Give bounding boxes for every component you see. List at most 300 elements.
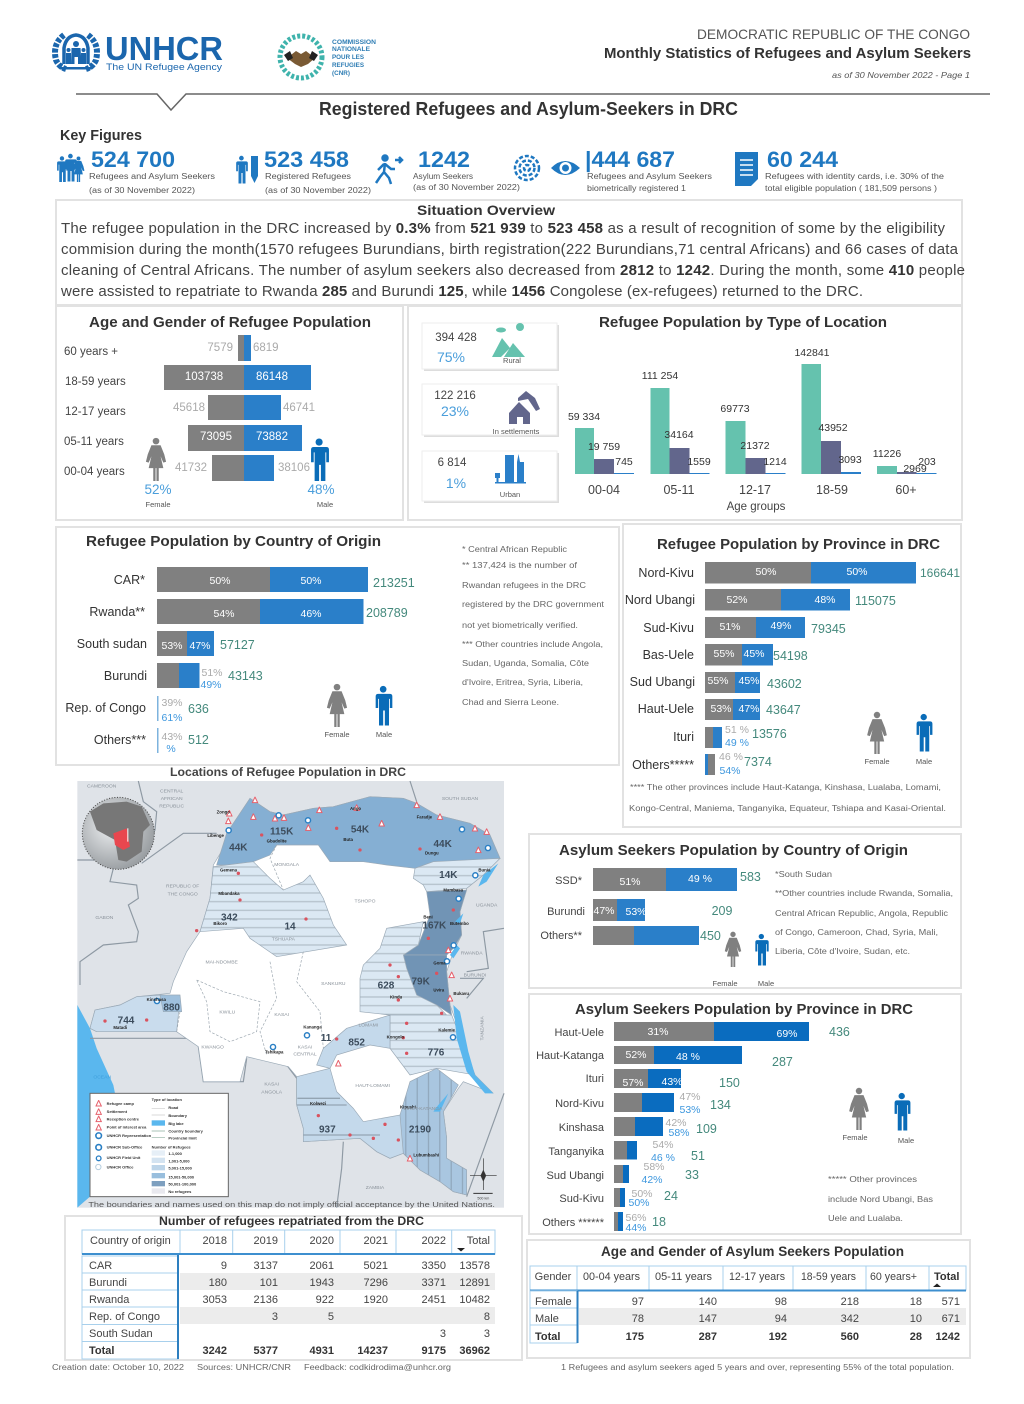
bar chart: 50% bbox=[631, 1188, 653, 1200]
site names: Kongolo bbox=[387, 1034, 405, 1039]
table: 10482 bbox=[459, 1294, 490, 1306]
caption: Refugees with identity cards, i.e. 30% of the bbox=[765, 172, 945, 181]
bar chart: age groups by location type bbox=[568, 347, 936, 513]
panel: refugee population by province bbox=[623, 524, 961, 827]
bar chart: country of origin: 53% bbox=[161, 640, 183, 652]
bar chart: country of origin: 43143 bbox=[228, 669, 263, 683]
bar chart: age groups by location type: 2969 bbox=[903, 463, 927, 475]
table: CAR bbox=[89, 1260, 112, 1272]
bar chart: 44% bbox=[625, 1222, 647, 1234]
pyramid chart: 73095 bbox=[200, 431, 232, 443]
table: 00-04 years bbox=[583, 1271, 640, 1283]
bar chart: 209 bbox=[712, 904, 732, 918]
refugee counts: 167K bbox=[422, 921, 447, 932]
header: report title: DEMOCRATIC REPUBLIC OF THE CONGO bbox=[697, 26, 970, 42]
bar chart: age groups by location type: 21372 bbox=[740, 440, 770, 452]
bar chart: country of origin: 39% bbox=[161, 697, 183, 709]
footnotes bbox=[462, 545, 605, 707]
bar chart: 134 bbox=[710, 1098, 731, 1112]
bar chart: Others ****** bbox=[542, 1217, 605, 1229]
footnotes: * Central African Republic bbox=[462, 545, 567, 554]
key figure: refugees: (as of 30 November 2022) bbox=[265, 186, 371, 195]
bar chart: country of origin: 47% bbox=[189, 640, 211, 652]
bar chart: age groups by location type: 3093 bbox=[838, 454, 862, 466]
map legend: Reception centre bbox=[107, 1116, 140, 1121]
icon: compass and scale bar bbox=[470, 1158, 497, 1200]
section heading: key figures: Key Figures bbox=[60, 127, 142, 144]
bar chart: SSD* bbox=[555, 875, 583, 887]
bar chart: province: 46 % bbox=[719, 751, 743, 763]
legend labels bbox=[324, 730, 392, 739]
bar chart: 69% bbox=[776, 1028, 798, 1040]
pyramid chart: 103738 bbox=[185, 371, 223, 383]
card: urban: Urban bbox=[500, 490, 520, 499]
pyramid chart: 46741 bbox=[283, 402, 315, 414]
bar chart: province: Sud Ubangi bbox=[630, 675, 695, 689]
bar chart bbox=[540, 868, 761, 945]
site names: Zongo bbox=[217, 809, 230, 814]
table: 2019 bbox=[254, 1235, 278, 1247]
footnote: Uele and Lualaba. bbox=[828, 1214, 903, 1223]
header: report title bbox=[604, 26, 971, 80]
site names: Tshikapa bbox=[265, 1049, 284, 1054]
lakes bbox=[433, 863, 498, 1112]
panel: age and gender of refugee population bbox=[56, 306, 403, 520]
heading: Asylum Seekers Population by Province in DRC bbox=[575, 1001, 913, 1018]
bar chart: province: Others***** bbox=[632, 758, 694, 772]
table: 1920 bbox=[364, 1294, 388, 1306]
table: 12-17 years bbox=[729, 1271, 785, 1283]
panel: refugee population by country of origin bbox=[56, 527, 619, 765]
bar chart: age groups by location type: 12-17 bbox=[739, 483, 771, 497]
footer: creation date, sources and feedback: Feedback: codkidrodima@unhcr.org bbox=[304, 1363, 451, 1372]
table: 98 bbox=[775, 1296, 787, 1308]
legend labels: Female bbox=[842, 1133, 868, 1142]
country and province labels: MONGALA bbox=[274, 862, 300, 868]
table: 97 bbox=[632, 1296, 644, 1308]
footnote bbox=[828, 1175, 933, 1223]
table: 2018 bbox=[203, 1235, 227, 1247]
legend labels bbox=[864, 757, 932, 766]
bar chart: 54% bbox=[652, 1139, 674, 1151]
pyramid chart: 73882 bbox=[256, 431, 288, 443]
icon: fingerprint bbox=[515, 156, 539, 180]
site names: Kolwezi bbox=[310, 1101, 326, 1106]
bar chart: country of origin: Burundi bbox=[104, 669, 147, 683]
bar chart: country of origin: Rwanda** bbox=[89, 605, 145, 619]
bar chart: province bbox=[625, 562, 960, 777]
bar chart: country of origin bbox=[65, 567, 415, 755]
map legend: No refugees bbox=[168, 1189, 192, 1194]
pyramid chart bbox=[64, 335, 315, 481]
refugee site markers bbox=[103, 797, 491, 1161]
bar chart: 31% bbox=[647, 1026, 669, 1038]
key figure: identity cards bbox=[735, 147, 945, 193]
CNR name bbox=[332, 40, 376, 77]
bar chart: 583 bbox=[740, 870, 761, 884]
map: locations of refugee population bbox=[77, 781, 504, 1209]
country and province labels: UGANDA bbox=[476, 903, 498, 909]
bar chart: province: 166641 bbox=[920, 566, 960, 580]
pyramid chart: 18-59 years bbox=[65, 376, 126, 388]
bar chart: country of origin: 636 bbox=[188, 702, 209, 716]
card: rural bbox=[422, 323, 559, 371]
table: Female bbox=[535, 1296, 572, 1308]
panel: situation overview bbox=[56, 200, 965, 305]
table: 18 bbox=[910, 1296, 922, 1308]
map legend: UNHCR Representation bbox=[107, 1133, 152, 1138]
panel: asylum seekers by province bbox=[529, 994, 961, 1234]
icon: female bbox=[849, 1088, 869, 1130]
card: rural: 75% bbox=[437, 349, 465, 365]
legend labels: Male bbox=[758, 979, 774, 988]
bar chart: Nord-Kivu bbox=[555, 1098, 604, 1110]
icon: male bbox=[917, 714, 932, 752]
table: 94 bbox=[775, 1313, 787, 1325]
footnotes: Rwandan refugees in the DRC bbox=[462, 581, 586, 590]
map legend: UNHCR Office bbox=[107, 1164, 134, 1169]
logo: CNR bbox=[280, 36, 376, 78]
map legend: Point of interest area bbox=[107, 1124, 147, 1129]
table: 560 bbox=[841, 1331, 859, 1343]
heading: Number of refugees repatriated from the DRC bbox=[159, 1214, 424, 1228]
map legend: 5,001-15,000 bbox=[168, 1166, 193, 1171]
table: 3 bbox=[272, 1311, 278, 1323]
footnotes: Central African Republic, Angola, Republic bbox=[775, 909, 948, 918]
key figure: identity cards: total eligible population ( 181,509 persons ) bbox=[765, 184, 937, 193]
footnotes: *** Other countries include Angola, bbox=[462, 640, 603, 649]
bar chart: province: Sud-Kivu bbox=[643, 621, 694, 635]
bar chart: province: 115075 bbox=[855, 594, 896, 608]
table: Total bbox=[89, 1345, 114, 1357]
internal province boundaries bbox=[177, 845, 323, 1055]
country and province labels: CENTRAL bbox=[293, 1052, 317, 1058]
card: in settlements: In settlements bbox=[493, 427, 540, 436]
pyramid chart: 05-11 years bbox=[64, 436, 124, 448]
table bbox=[82, 1230, 495, 1359]
table: 2021 bbox=[364, 1235, 388, 1247]
bar chart: Haut-Uele bbox=[554, 1027, 604, 1039]
bar chart: country of origin: South sudan bbox=[77, 637, 147, 651]
table: Gender bbox=[535, 1271, 572, 1283]
bar chart: country of origin: 50% bbox=[300, 575, 322, 587]
footer: creation date, sources and feedback bbox=[52, 1363, 451, 1372]
table: 13578 bbox=[459, 1260, 490, 1272]
map legend: Big lake bbox=[168, 1121, 184, 1126]
table: 287 bbox=[699, 1331, 717, 1343]
refugee counts: 11 bbox=[321, 1033, 332, 1044]
CNR name: NATIONALE bbox=[332, 47, 370, 53]
caption: Refugees and Asylum Seekers bbox=[587, 172, 712, 181]
footnote: ***** Other provinces bbox=[828, 1175, 917, 1184]
bar chart: province: 50% bbox=[755, 566, 777, 578]
bar chart: 33 bbox=[685, 1168, 699, 1182]
icon: settlement houses bbox=[509, 391, 540, 424]
bar chart: 24 bbox=[664, 1189, 678, 1203]
country and province labels: REPUBLIC bbox=[159, 804, 185, 810]
site names: Butembo bbox=[450, 921, 469, 926]
key figure: asylum seekers bbox=[376, 147, 520, 192]
table: South Sudan bbox=[89, 1328, 153, 1340]
table: 3371 bbox=[422, 1277, 446, 1289]
table: 192 bbox=[769, 1331, 787, 1343]
country and province labels: KASAI bbox=[274, 1012, 289, 1018]
bar chart: age groups by location type: 69773 bbox=[720, 403, 750, 415]
table: 7296 bbox=[364, 1277, 388, 1289]
table: 5021 bbox=[364, 1260, 388, 1272]
map legend: UNHCR Field Unit bbox=[107, 1155, 141, 1160]
title: Registered Refugees and Asylum-Seekers in DRC bbox=[319, 99, 738, 119]
heading: Refugee Population by Country of Origin bbox=[86, 533, 381, 550]
bar chart: province: 45% bbox=[743, 648, 765, 660]
table: 147 bbox=[699, 1313, 717, 1325]
footnotes: Liberia, Côte d'Ivoire, Sudan, etc. bbox=[775, 947, 910, 956]
map legend: 1,001-5,000 bbox=[168, 1158, 190, 1163]
map legend: 50,001-100,000 bbox=[168, 1182, 197, 1187]
map legend: Refugee camp bbox=[107, 1101, 134, 1106]
footnotes bbox=[775, 870, 953, 956]
globe inset bbox=[82, 797, 154, 869]
header: report title: Monthly Statistics of Refugees and Asylum Seekers bbox=[604, 45, 971, 62]
bar chart: country of origin: 51% bbox=[201, 667, 223, 679]
table: 2451 bbox=[422, 1294, 446, 1306]
bar chart: 150 bbox=[719, 1076, 740, 1090]
table: 3350 bbox=[422, 1260, 446, 1272]
caption: Refugees and Asylum Seekers bbox=[89, 172, 215, 181]
bar chart: age groups by location type: 111 254 bbox=[642, 370, 678, 382]
map legend bbox=[90, 1093, 228, 1197]
site names: Buta bbox=[343, 837, 354, 842]
site names: Kinshasa bbox=[147, 997, 167, 1002]
map legend: 1-1,000 bbox=[168, 1151, 183, 1156]
body text: The refugee population in the DRC increased by 0.3% from 521 939 to 523 458 as a result of recognition of some by the eligibility bbox=[61, 220, 946, 237]
table: 2020 bbox=[310, 1235, 334, 1247]
table: 342 bbox=[841, 1313, 859, 1325]
table bbox=[530, 1266, 966, 1343]
legend labels: Female bbox=[864, 757, 890, 766]
country and province labels: HAUT-LOMAMI bbox=[355, 1083, 390, 1089]
gender shares: Male bbox=[317, 500, 333, 509]
country and province labels: HAUT-KATANGA bbox=[404, 1106, 443, 1112]
map legend: Boundary bbox=[168, 1113, 188, 1118]
site names: Mbandaka bbox=[218, 891, 240, 896]
site names: Gbadolite bbox=[267, 838, 287, 843]
legend labels: Male bbox=[898, 1136, 914, 1145]
DRC provinces bbox=[90, 797, 500, 1195]
table: 3053 bbox=[203, 1294, 227, 1306]
icon: UNHCR emblem bbox=[55, 35, 97, 70]
icon: walking person with arrow bbox=[376, 156, 402, 184]
table: 28 bbox=[910, 1331, 922, 1343]
value: 60 244 bbox=[767, 147, 839, 172]
icon: document bbox=[735, 152, 758, 186]
bar chart: province: 43647 bbox=[766, 703, 801, 717]
bar chart: country of origin: 46% bbox=[300, 608, 322, 620]
logo: UNHCR bbox=[55, 30, 223, 73]
key figure: biometric bbox=[515, 147, 712, 193]
table: 180 bbox=[209, 1277, 227, 1289]
site names: Lubumbashi bbox=[413, 1153, 439, 1158]
icon: female bbox=[725, 932, 741, 967]
bar chart: province: Nord-Kivu bbox=[638, 566, 694, 580]
bar chart: province: 49 % bbox=[725, 737, 749, 749]
panel: refugees repatriated table bbox=[65, 1214, 522, 1360]
refugee counts: 115K bbox=[270, 826, 294, 837]
gender shares: 48% bbox=[307, 482, 335, 497]
country and province labels: THE CONGO bbox=[168, 892, 198, 898]
map legend: Country boundary bbox=[168, 1129, 204, 1134]
refugee counts: 44K bbox=[229, 842, 248, 853]
bar chart: country of origin: 57127 bbox=[220, 638, 255, 652]
pyramid chart: 86148 bbox=[256, 371, 288, 383]
footer: creation date, sources and feedback: Sources: UNHCR/CNR bbox=[197, 1363, 291, 1372]
site names: Faradje bbox=[417, 814, 433, 819]
table: 140 bbox=[699, 1296, 717, 1308]
gender shares bbox=[144, 482, 335, 509]
heading: Age and Gender of Refugee Population bbox=[89, 315, 371, 331]
country and province labels: CENTRAL bbox=[160, 788, 184, 794]
site names: Bikoro bbox=[213, 921, 227, 926]
table: 9 bbox=[221, 1260, 227, 1272]
country and province labels: KWILU bbox=[219, 1009, 236, 1015]
table: 3 bbox=[440, 1328, 446, 1340]
bar chart: age groups by location type: 19 759 bbox=[588, 441, 620, 453]
footer: creation date, sources and feedback: Creation date: October 10, 2022 bbox=[52, 1363, 185, 1372]
table: 60 years+ bbox=[870, 1271, 917, 1283]
body text bbox=[60, 220, 965, 300]
ocean bbox=[77, 1005, 115, 1208]
pyramid chart: 00-04 years bbox=[64, 466, 125, 478]
site names: Goma bbox=[433, 960, 446, 965]
footnote: biometric registration: 1 Refugees and asylum seekers aged 5 years and over, representing 55% of the total population. bbox=[561, 1363, 954, 1372]
table: 14237 bbox=[357, 1345, 388, 1357]
card: urban: 6 814 bbox=[438, 457, 467, 469]
bar chart: country of origin: 208789 bbox=[366, 606, 408, 620]
CNR name: (CNR) bbox=[332, 71, 350, 77]
bar chart: age groups by location type: 05-11 bbox=[663, 483, 695, 497]
site names: Uvira bbox=[433, 988, 445, 993]
key figure: refugees bbox=[236, 147, 371, 195]
bar chart: Others** bbox=[540, 930, 583, 942]
country and province labels: SOUTH SUDAN bbox=[442, 796, 479, 802]
country and province labels: OCEAN bbox=[93, 1074, 111, 1080]
site names: Dungu bbox=[425, 850, 439, 855]
CNR name: REFUGIES bbox=[332, 63, 364, 69]
refugee counts: 937 bbox=[319, 1125, 336, 1136]
table: 18-59 years bbox=[801, 1271, 856, 1283]
table: 8 bbox=[484, 1311, 490, 1323]
site names: Kindu bbox=[390, 994, 403, 999]
country and province labels: CAMEROON bbox=[87, 784, 117, 790]
table: 9175 bbox=[422, 1345, 446, 1357]
refugee counts: 79K bbox=[411, 977, 431, 988]
refugee counts: 44K bbox=[433, 839, 453, 850]
bar chart: 50% bbox=[628, 1197, 650, 1209]
site names: Bunia bbox=[478, 868, 491, 873]
bar chart: 53% bbox=[625, 906, 647, 918]
map legend: Settlement bbox=[107, 1109, 128, 1114]
table: 3137 bbox=[254, 1260, 278, 1272]
icon: female bbox=[867, 712, 887, 754]
bar chart: province: 54% bbox=[719, 765, 741, 777]
bar chart: 47% bbox=[679, 1091, 701, 1103]
card: in settlements: 122 216 bbox=[434, 390, 476, 402]
bar chart: 47% bbox=[593, 905, 615, 917]
bar chart: province: Haut-Uele bbox=[638, 702, 694, 716]
icon: male bbox=[376, 686, 392, 726]
footnotes: of Congo, Cameroon, Chad, Syria, Mali, bbox=[775, 928, 938, 937]
icon: urban buildings bbox=[495, 454, 526, 484]
icon: rural mountains bbox=[492, 323, 525, 357]
legend labels: Male bbox=[376, 730, 392, 739]
country and province labels: AFRICAN bbox=[161, 796, 183, 802]
heading: Situation Overview bbox=[417, 202, 555, 218]
table: 3242 bbox=[203, 1345, 227, 1357]
legend labels bbox=[712, 979, 774, 988]
refugee counts: 342 bbox=[221, 912, 238, 923]
icon: male bbox=[755, 934, 769, 966]
panel: asylum seekers by country of origin bbox=[529, 834, 961, 988]
bar chart: country of origin: 213251 bbox=[373, 576, 415, 590]
bar chart: province: 13576 bbox=[752, 727, 787, 741]
gender shares: Female bbox=[145, 500, 171, 509]
header: report title: as of 30 November 2022 - Page 1 bbox=[832, 70, 970, 80]
bar chart: Sud Ubangi bbox=[546, 1170, 604, 1182]
panel: age and gender of asylum seekers table bbox=[527, 1240, 970, 1358]
country and province labels: KASAI bbox=[298, 1044, 312, 1050]
bar chart: province: 47% bbox=[738, 703, 760, 715]
country and province labels: GABON bbox=[95, 915, 114, 921]
site names: Kipushi bbox=[400, 1104, 416, 1109]
bar chart: Burundi bbox=[547, 906, 585, 918]
footnotes: registered by the DRC government bbox=[462, 600, 605, 609]
bar chart: 436 bbox=[829, 1025, 850, 1039]
table: 05-11 years bbox=[655, 1271, 712, 1283]
table: Total bbox=[467, 1235, 490, 1247]
footnote: include Nord Ubangi, Bas bbox=[828, 1195, 933, 1204]
table: 2022 bbox=[422, 1235, 446, 1247]
bar chart: province: 49% bbox=[770, 620, 792, 632]
bar chart: 43% bbox=[661, 1076, 683, 1088]
bar chart: province: 43602 bbox=[767, 677, 802, 691]
bar chart: age groups by location type: 1214 bbox=[763, 456, 787, 468]
pyramid chart: 12-17 years bbox=[65, 406, 126, 418]
icon: compass and scale bar: 500 km bbox=[477, 1196, 489, 1200]
table: Rwanda bbox=[89, 1294, 130, 1306]
map legend: UNHCR Sub-Office bbox=[107, 1144, 143, 1149]
bar chart: 53% bbox=[679, 1104, 701, 1116]
bar chart: 48 % bbox=[676, 1051, 700, 1063]
table: 78 bbox=[632, 1313, 644, 1325]
table: Male bbox=[535, 1313, 559, 1325]
card: urban bbox=[422, 451, 559, 503]
bar chart: province: 52% bbox=[726, 594, 748, 606]
bar chart: 51 bbox=[691, 1149, 705, 1163]
table: 2061 bbox=[310, 1260, 334, 1272]
table: 36962 bbox=[459, 1345, 490, 1357]
gender shares: 52% bbox=[144, 482, 172, 497]
table: 5377 bbox=[254, 1345, 278, 1357]
country and province labels: LOMAMI bbox=[358, 1023, 378, 1029]
icon: family bbox=[57, 154, 84, 182]
footnotes: **Other countries include Rwanda, Somalia, bbox=[775, 889, 953, 898]
country and province labels: KWANGO bbox=[201, 1044, 224, 1050]
site names: Matadi bbox=[113, 1025, 127, 1030]
refugee counts: 2190 bbox=[409, 1125, 432, 1136]
table: 922 bbox=[316, 1294, 334, 1306]
key figure: biometric: biometrically registered 1 bbox=[587, 184, 687, 193]
heading: Age and Gender of Asylum Seekers Population bbox=[601, 1244, 904, 1259]
